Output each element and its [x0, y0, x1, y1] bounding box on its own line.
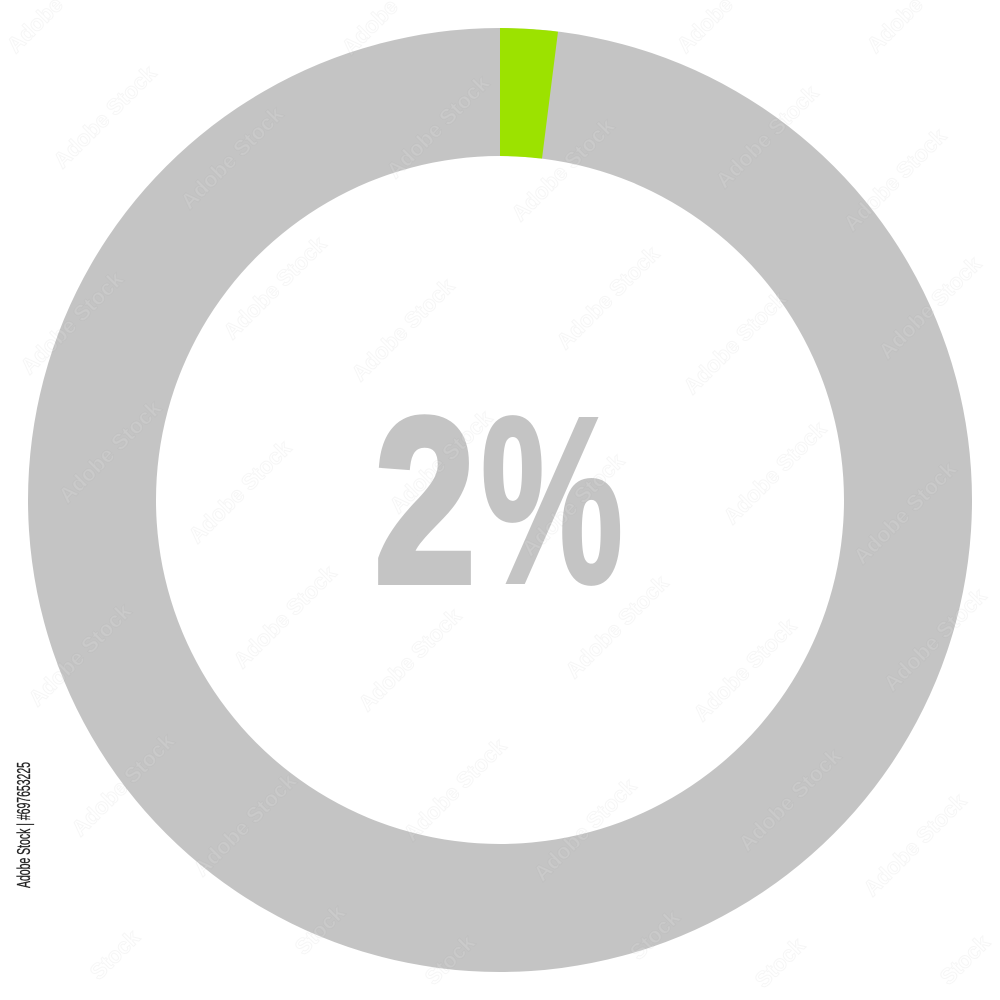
faint stock watermark pattern: Adobe Stock [66, 728, 180, 841]
faint stock watermark pattern: Adobe Stock [551, 241, 665, 354]
faint stock watermark pattern: Adobe Stock [516, 448, 630, 561]
faint stock watermark pattern: Stock [290, 899, 350, 960]
faint stock watermark pattern: Adobe Stock [381, 70, 495, 183]
faint stock watermark pattern: Adobe Stock [710, 80, 824, 193]
faint stock watermark pattern: Stock [625, 904, 685, 965]
faint stock watermark pattern: Adobe Stock [346, 273, 460, 386]
faint stock watermark pattern: Adobe Stock [678, 286, 792, 399]
faint stock watermark pattern: Stock [420, 929, 480, 990]
faint stock watermark pattern: Adobe Stock [398, 733, 512, 846]
faint stock watermark pattern: Adobe Stock [188, 768, 302, 881]
faint stock watermark pattern: Adobe Stock [858, 788, 972, 901]
faint stock watermark pattern: Adobe Stock [53, 395, 167, 508]
faint stock watermark pattern: Adobe Stock [733, 743, 847, 856]
faint stock watermark pattern: Adobe Stock [183, 435, 297, 548]
faint stock watermark pattern: Adobe Stock [218, 231, 332, 344]
faint stock watermark pattern: Adobe Stock [848, 456, 962, 569]
faint stock watermark pattern: Stock [750, 932, 810, 993]
faint stock watermark pattern: Stock [935, 929, 995, 990]
faint stock watermark pattern: Adobe Stock [15, 266, 129, 379]
faint stock watermark pattern: Adobe Stock [353, 603, 467, 716]
faint stock watermark pattern: Adobe Stock [873, 251, 987, 364]
faint stock watermark pattern: Adobe Stock [506, 113, 620, 226]
faint stock watermark pattern: Adobe Stock [384, 405, 498, 518]
faint stock watermark pattern: Adobe Stock [175, 101, 289, 214]
faint stock watermark pattern: Adobe Stock [528, 773, 642, 886]
faint stock watermark pattern: Adobe Stock [718, 416, 832, 529]
donut segment: 2 percent [500, 28, 558, 159]
digit 2: 2 [375, 371, 475, 631]
faint stock watermark pattern: Adobe Stock [48, 60, 162, 173]
faint stock watermark pattern: Adobe Stock [688, 613, 802, 726]
faint stock watermark pattern: Stock [85, 924, 145, 985]
percent sign: % [481, 368, 623, 633]
stock image id: Adobe Stock | #697653225 [13, 762, 34, 888]
faint stock watermark pattern: Adobe Stock [228, 560, 342, 673]
faint stock watermark pattern: Adobe Stock [23, 598, 137, 711]
faint stock watermark pattern: Adobe Stock [838, 123, 952, 236]
center label: 2% [375, 368, 623, 633]
faint stock watermark pattern: Adobe Stock [560, 570, 674, 683]
faint stock watermark pattern: Adobe Stock [878, 583, 992, 696]
